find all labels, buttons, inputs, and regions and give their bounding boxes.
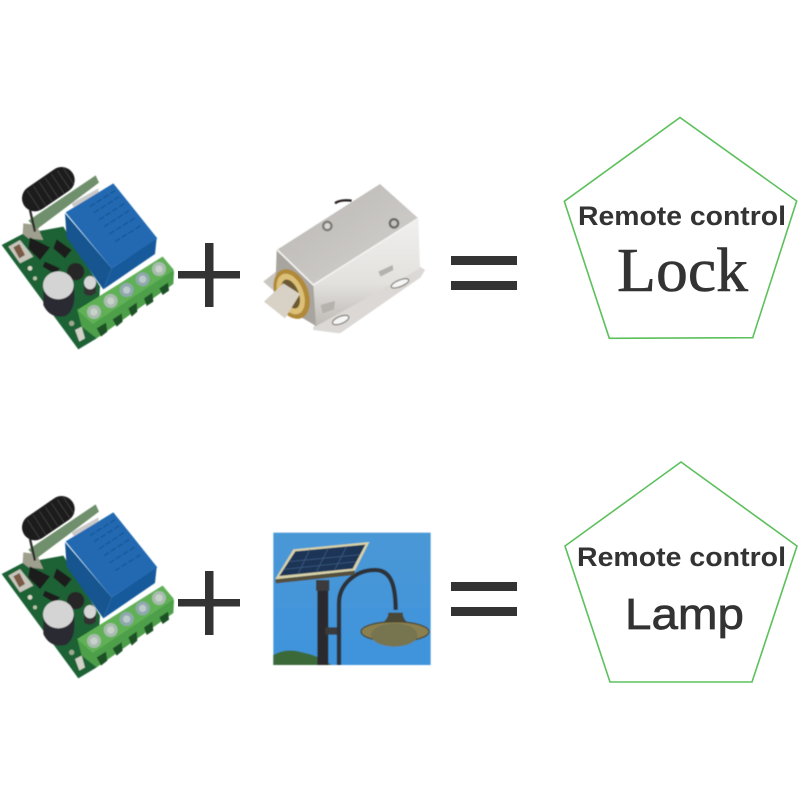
- top row: relay module photo: [2, 168, 174, 349]
- bottom row: relay module photo: [2, 497, 174, 678]
- bottom row: plus sign: [178, 571, 240, 635]
- bottom row: result pentagon: [565, 462, 797, 682]
- bottom row: equals sign: [451, 582, 517, 616]
- label: lamp: Lamp: [625, 590, 744, 639]
- bottom row: solar lamp photo: [273, 533, 431, 665]
- label: remote control: Remote control: [577, 542, 786, 572]
- top row: plus sign: [178, 243, 240, 307]
- top row: electric lock photo: [263, 184, 425, 333]
- label: lock: Lock: [617, 237, 748, 305]
- top row: result pentagon: [564, 118, 797, 338]
- top row: equals sign: [451, 256, 517, 290]
- label: remote control: Remote control: [578, 201, 786, 231]
